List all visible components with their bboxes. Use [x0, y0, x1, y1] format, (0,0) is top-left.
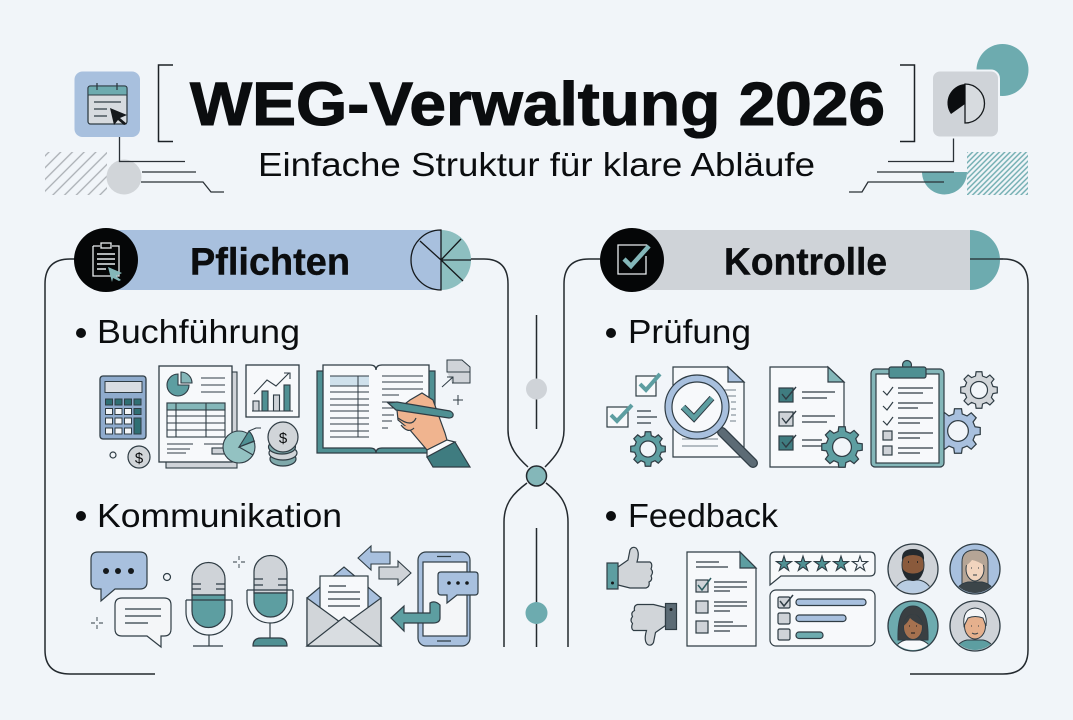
header band: [106, 230, 441, 290]
icon: financial report: [159, 366, 261, 468]
bullet: Prüfung: Prüfung: [628, 313, 751, 350]
bullet: Buchführung: Buchführung: [97, 313, 300, 350]
icon: coin stack: $: [279, 430, 288, 447]
icon: microphones: [186, 556, 293, 646]
right title bracket: [900, 65, 914, 142]
badge icon: clipboard: [74, 228, 138, 292]
icon: document with magnifier: [665, 367, 753, 463]
avatar: older man: [950, 601, 1000, 654]
pie end cap: [411, 230, 471, 290]
icon: star rating bubble: [770, 552, 875, 585]
icon: calculator: [100, 376, 146, 439]
panel: Pflichten: [45, 228, 478, 674]
icon: rating bars: [770, 590, 875, 646]
heading: Kontrolle: [724, 242, 887, 284]
icon: envelope with letter: [307, 567, 381, 646]
icon: growth chart: [246, 365, 299, 417]
icon: calendar with cursor: [74, 72, 140, 137]
header decoration: right: [849, 44, 1028, 195]
icon: coin stack: [268, 422, 298, 466]
icon: open ledger with writing hand: [317, 360, 470, 467]
badge icon: checkbox: [600, 228, 664, 292]
icon: dollar coin: $: [135, 450, 144, 467]
icon: dollar coin: [110, 446, 150, 468]
subtitle: Einfache Struktur für klare Abläufe: [258, 146, 815, 183]
avatar: woman with short hair: [950, 544, 1000, 596]
header band: [632, 230, 970, 290]
bullet: Kommunikation: Kommunikation: [97, 497, 342, 534]
heading: Pflichten: [190, 242, 350, 284]
avatar: man with beard: [888, 544, 938, 596]
header decoration: left: [45, 137, 224, 195]
icon: survey document: [687, 552, 756, 646]
teal end cap: [970, 230, 1003, 290]
avatar: woman with dark hair: [888, 601, 938, 654]
panel outline: [45, 259, 155, 674]
left title bracket: [158, 65, 173, 142]
panel outline: [910, 259, 1028, 674]
icon: thumbs up and down: [607, 547, 676, 645]
title: WEG-Verwaltung 2026: [190, 70, 885, 138]
icon: small checkboxes and gear: [607, 374, 665, 466]
icon: exchange arrows: [358, 546, 411, 585]
icon: smartphone with chat: [391, 552, 478, 646]
panel: Kontrolle: [600, 228, 1028, 674]
icon: checklist with gear: [770, 367, 862, 467]
icon: pie chart tile: [932, 70, 999, 138]
bullet: Feedback: Feedback: [628, 497, 779, 534]
connector lines and nodes: [470, 259, 600, 647]
icon: speech bubbles: [91, 552, 245, 647]
icon: clipboard with gears: [871, 360, 997, 467]
